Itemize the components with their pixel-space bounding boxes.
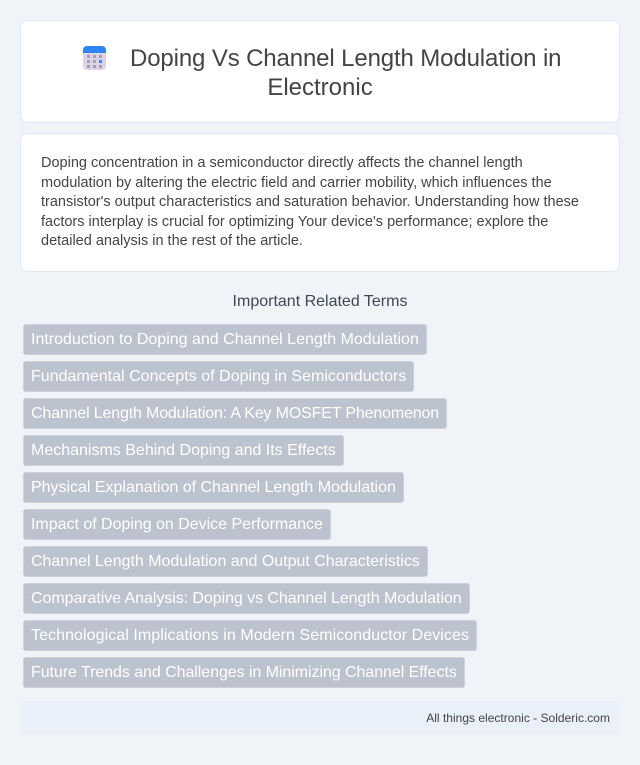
intro paragraph: detailed analysis in the rest of the article. — [41, 233, 303, 249]
tag: Impact of Doping on Device Performance — [31, 516, 323, 533]
tag: Fundamental Concepts of Doping in Semiconductors — [31, 368, 406, 385]
tag — [23, 361, 414, 392]
tag: Introduction to Doping and Channel Length Modulation — [31, 331, 419, 348]
panel: title card — [20, 20, 620, 123]
intro paragraph: transistor's output characteristics and saturation behavior. Understanding how these — [41, 194, 579, 210]
intro paragraph — [41, 155, 579, 249]
tag: Comparative Analysis: Doping vs Channel Length Modulation — [31, 590, 462, 607]
title: Electronic — [267, 74, 373, 101]
tag: Physical Explanation of Channel Length Modulation — [31, 479, 396, 496]
tag: Mechanisms Behind Doping and Its Effects — [31, 442, 336, 459]
tag — [23, 398, 447, 429]
tag: Technological Implications in Modern Semiconductor Devices — [31, 627, 469, 644]
tag — [23, 657, 465, 688]
tag — [23, 435, 344, 466]
tag — [23, 509, 331, 540]
panel: intro text — [20, 133, 620, 272]
intro paragraph: Doping concentration in a semiconductor directly affects the channel length — [41, 155, 523, 171]
intro paragraph: factors interplay is crucial for optimizing Your device's performance; explore the — [41, 214, 548, 230]
footer — [20, 701, 620, 735]
tag: Future Trends and Challenges in Minimizing Channel Effects — [31, 664, 457, 681]
icon: calendar — [83, 46, 106, 70]
tag — [23, 472, 404, 503]
footer: All things electronic - Solderic.com — [426, 711, 610, 725]
title — [130, 45, 561, 101]
tag: Channel Length Modulation and Output Characteristics — [31, 553, 420, 570]
title: Doping Vs Channel Length Modulation in — [130, 45, 561, 72]
list: related term tags — [23, 324, 477, 688]
heading: related terms: Important Related Terms — [233, 293, 407, 310]
tag — [23, 546, 428, 577]
intro paragraph: modulation by altering the electric field and carrier mobility, which influences the — [41, 175, 552, 191]
tag — [23, 620, 477, 651]
tag — [23, 583, 470, 614]
tag: Channel Length Modulation: A Key MOSFET Phenomenon — [31, 405, 439, 422]
tag — [23, 324, 427, 355]
